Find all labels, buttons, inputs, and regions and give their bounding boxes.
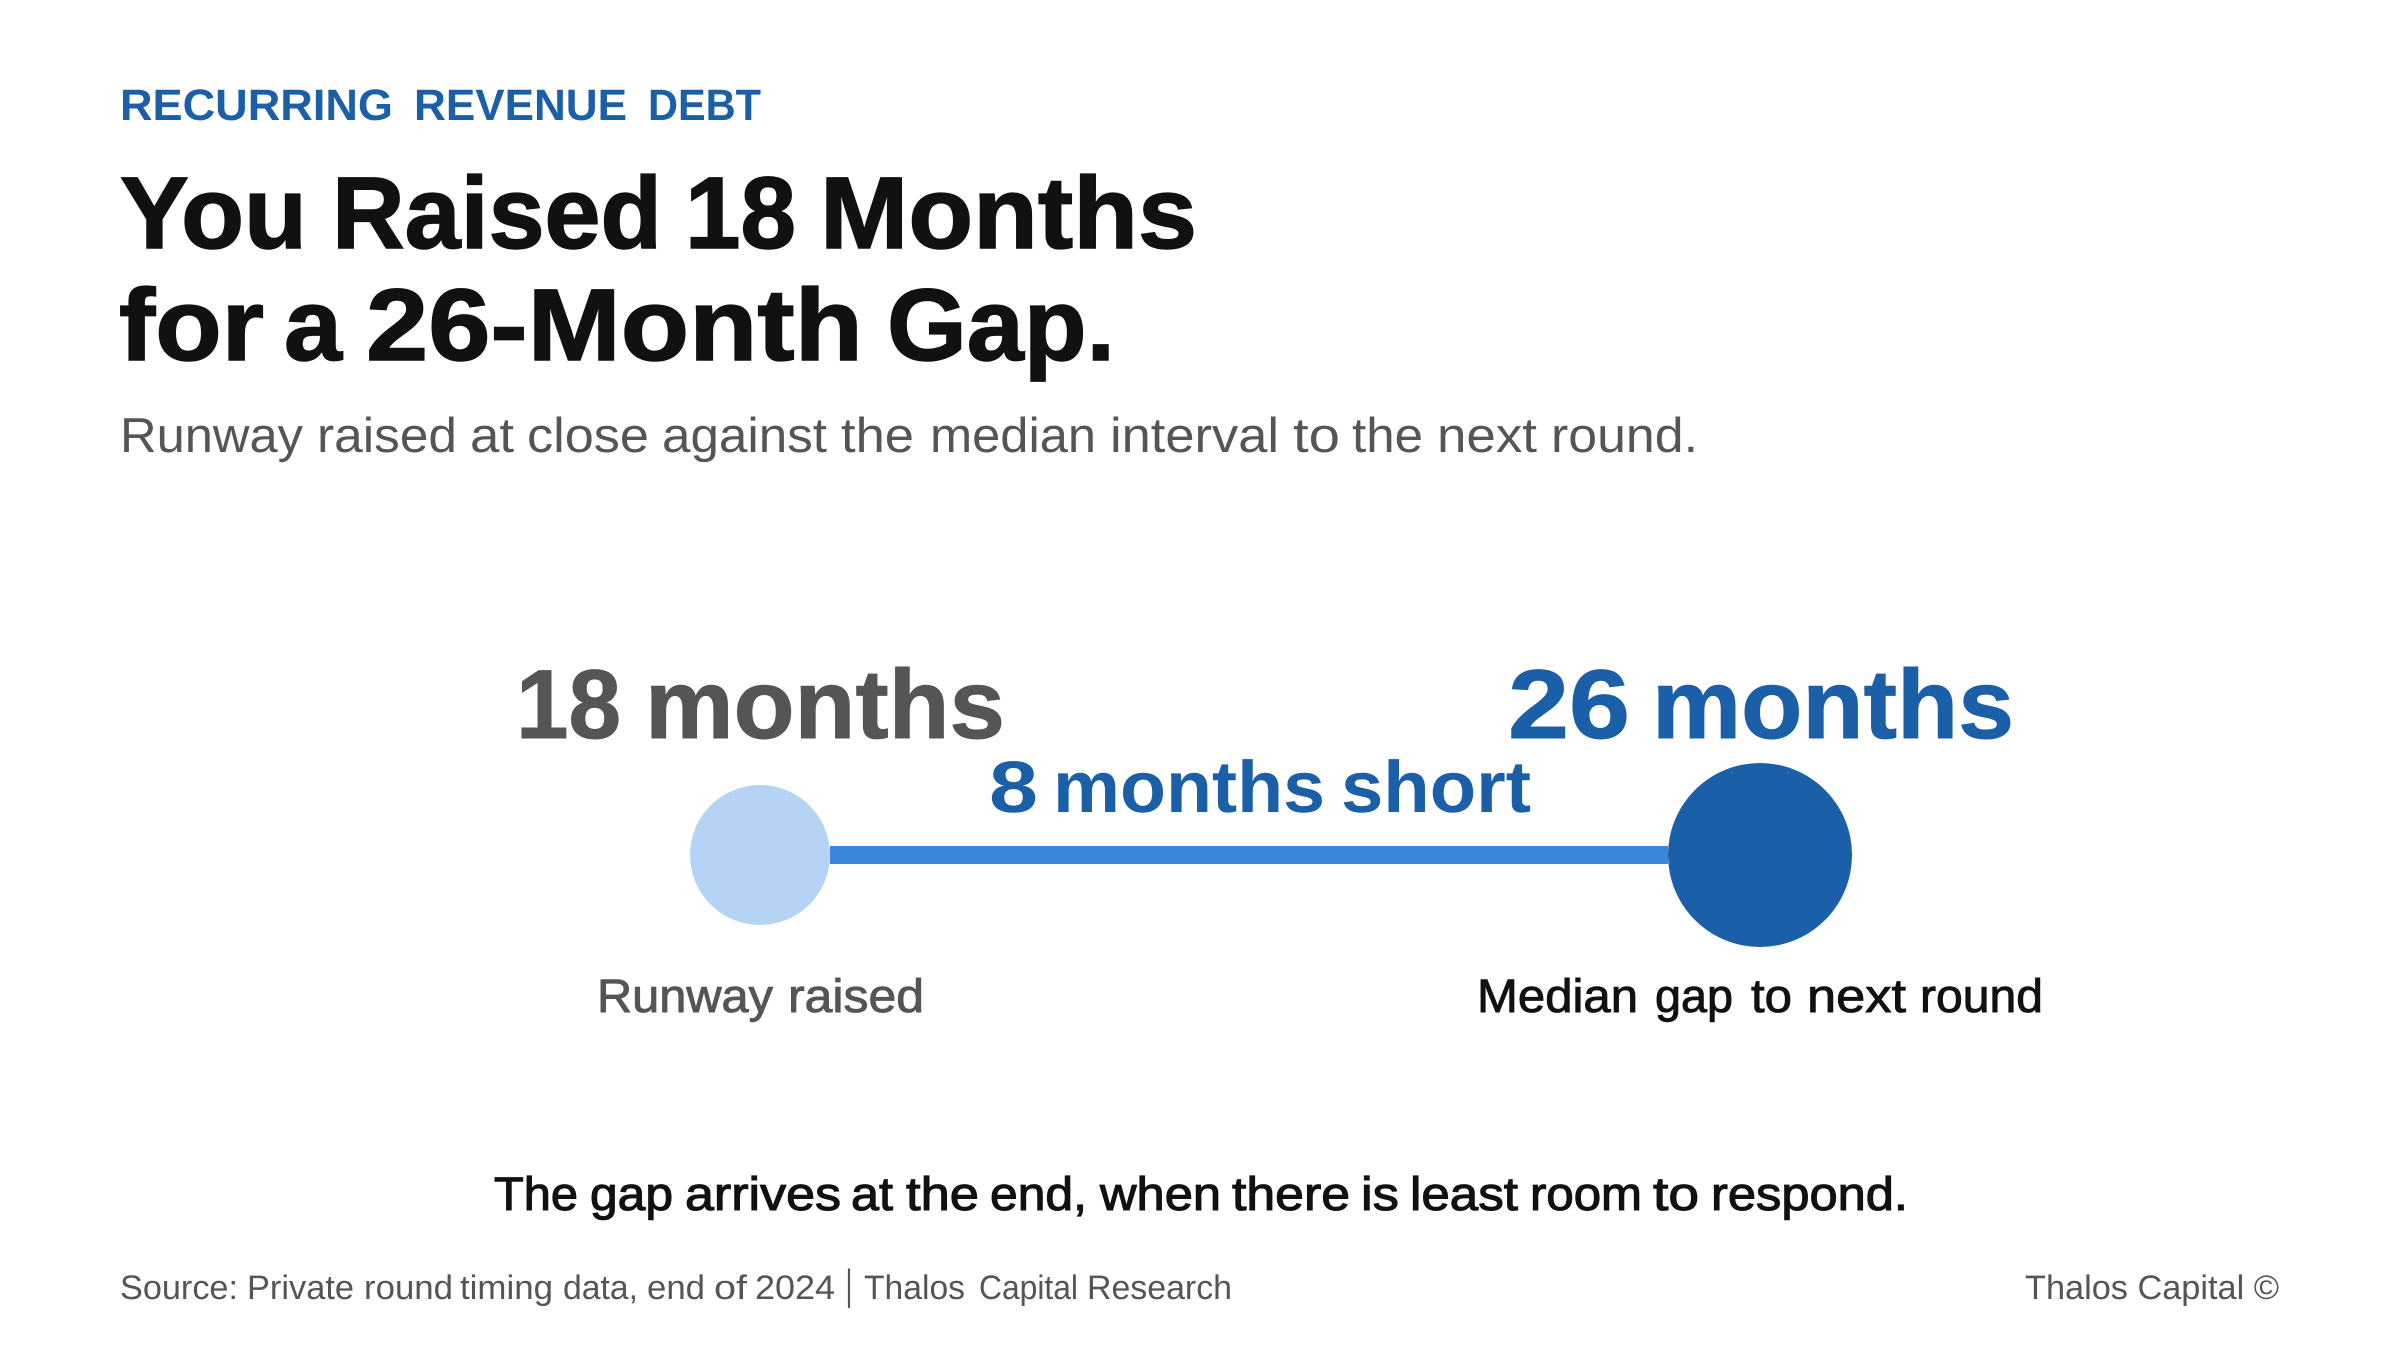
takeaway: gap xyxy=(590,1167,673,1220)
source note: 2024 xyxy=(755,1269,835,1307)
label: runway raised: Runway xyxy=(597,969,774,1022)
takeaway: The xyxy=(494,1167,578,1220)
title line 2 xyxy=(119,268,1115,382)
source note: | xyxy=(846,1261,852,1308)
title line 2: 26-Month xyxy=(366,268,863,382)
source note: of xyxy=(714,1269,748,1307)
takeaway xyxy=(494,1167,1908,1220)
source note xyxy=(120,1261,1232,1308)
takeaway: there xyxy=(1232,1167,1350,1220)
label: median gap: to xyxy=(1751,969,1792,1022)
subtitle: at xyxy=(470,409,514,463)
circle: median gap xyxy=(1668,763,1852,947)
source note: timing xyxy=(460,1269,553,1307)
title line 1: You xyxy=(120,156,307,270)
value: 18 months: 18 xyxy=(516,649,621,759)
brand credit: Thalos Capital © xyxy=(2025,1269,2279,1307)
connector bar xyxy=(830,846,1668,864)
label: median gap: gap xyxy=(1655,969,1733,1022)
takeaway: room xyxy=(1530,1167,1642,1220)
source note: Source: xyxy=(120,1269,238,1307)
takeaway: when xyxy=(1099,1167,1221,1220)
title xyxy=(119,156,1197,382)
takeaway: to xyxy=(1653,1167,1699,1220)
takeaway: end, xyxy=(990,1167,1087,1220)
subtitle: to xyxy=(1293,409,1340,463)
value: 26 months: months xyxy=(1652,649,2014,759)
title line 2: Gap. xyxy=(887,268,1115,382)
subtitle: the xyxy=(841,409,914,463)
subtitle: the xyxy=(1352,409,1423,463)
label: median gap: Median xyxy=(1477,969,1638,1022)
eyebrow: REVENUE xyxy=(414,81,627,130)
source note: Research xyxy=(1087,1269,1232,1307)
eyebrow xyxy=(120,81,761,130)
takeaway: is xyxy=(1361,1167,1399,1220)
subtitle: median xyxy=(930,409,1096,463)
gap label: months xyxy=(1053,747,1325,828)
takeaway: least xyxy=(1410,1167,1518,1220)
title line 1 xyxy=(120,156,1197,270)
takeaway: at xyxy=(851,1167,893,1220)
label: median gap: next xyxy=(1807,969,1906,1022)
subtitle xyxy=(120,409,1698,463)
eyebrow: DEBT xyxy=(648,81,761,130)
subtitle: against xyxy=(662,409,827,463)
label: median gap: round xyxy=(1920,969,2043,1022)
title line 1: Months xyxy=(820,156,1197,270)
takeaway: respond. xyxy=(1711,1167,1908,1220)
source note: Thalos xyxy=(864,1269,965,1307)
title line 1: 18 xyxy=(685,156,796,270)
subtitle: next xyxy=(1437,409,1537,463)
title line 2: for xyxy=(119,268,264,382)
value: 26 months xyxy=(1508,649,2014,759)
value: 26 months: 26 xyxy=(1508,649,1630,759)
source note: round xyxy=(364,1269,453,1307)
takeaway: the xyxy=(906,1167,979,1220)
source note: Private xyxy=(247,1269,354,1307)
gap label: 8 xyxy=(989,747,1038,828)
subtitle: raised xyxy=(317,409,457,463)
subtitle: interval xyxy=(1110,409,1279,463)
source note: Capital xyxy=(979,1269,1078,1307)
label: runway raised xyxy=(597,969,924,1022)
gap label: short xyxy=(1341,747,1531,828)
takeaway: arrives xyxy=(685,1167,841,1220)
subtitle: Runway xyxy=(120,409,304,463)
circle: runway raised xyxy=(690,785,830,925)
title line 2: a xyxy=(284,268,343,382)
source note: end xyxy=(647,1269,705,1307)
label: median gap xyxy=(1477,969,2043,1022)
gap chart xyxy=(516,649,2043,1022)
label: runway raised: raised xyxy=(788,969,924,1022)
gap label xyxy=(989,747,1531,828)
title line 1: Raised xyxy=(332,156,662,270)
subtitle: close xyxy=(527,409,649,463)
eyebrow: RECURRING xyxy=(120,81,393,130)
value: 18 months: months xyxy=(645,649,1005,759)
subtitle: round. xyxy=(1551,409,1698,463)
source note: data, xyxy=(563,1269,638,1307)
